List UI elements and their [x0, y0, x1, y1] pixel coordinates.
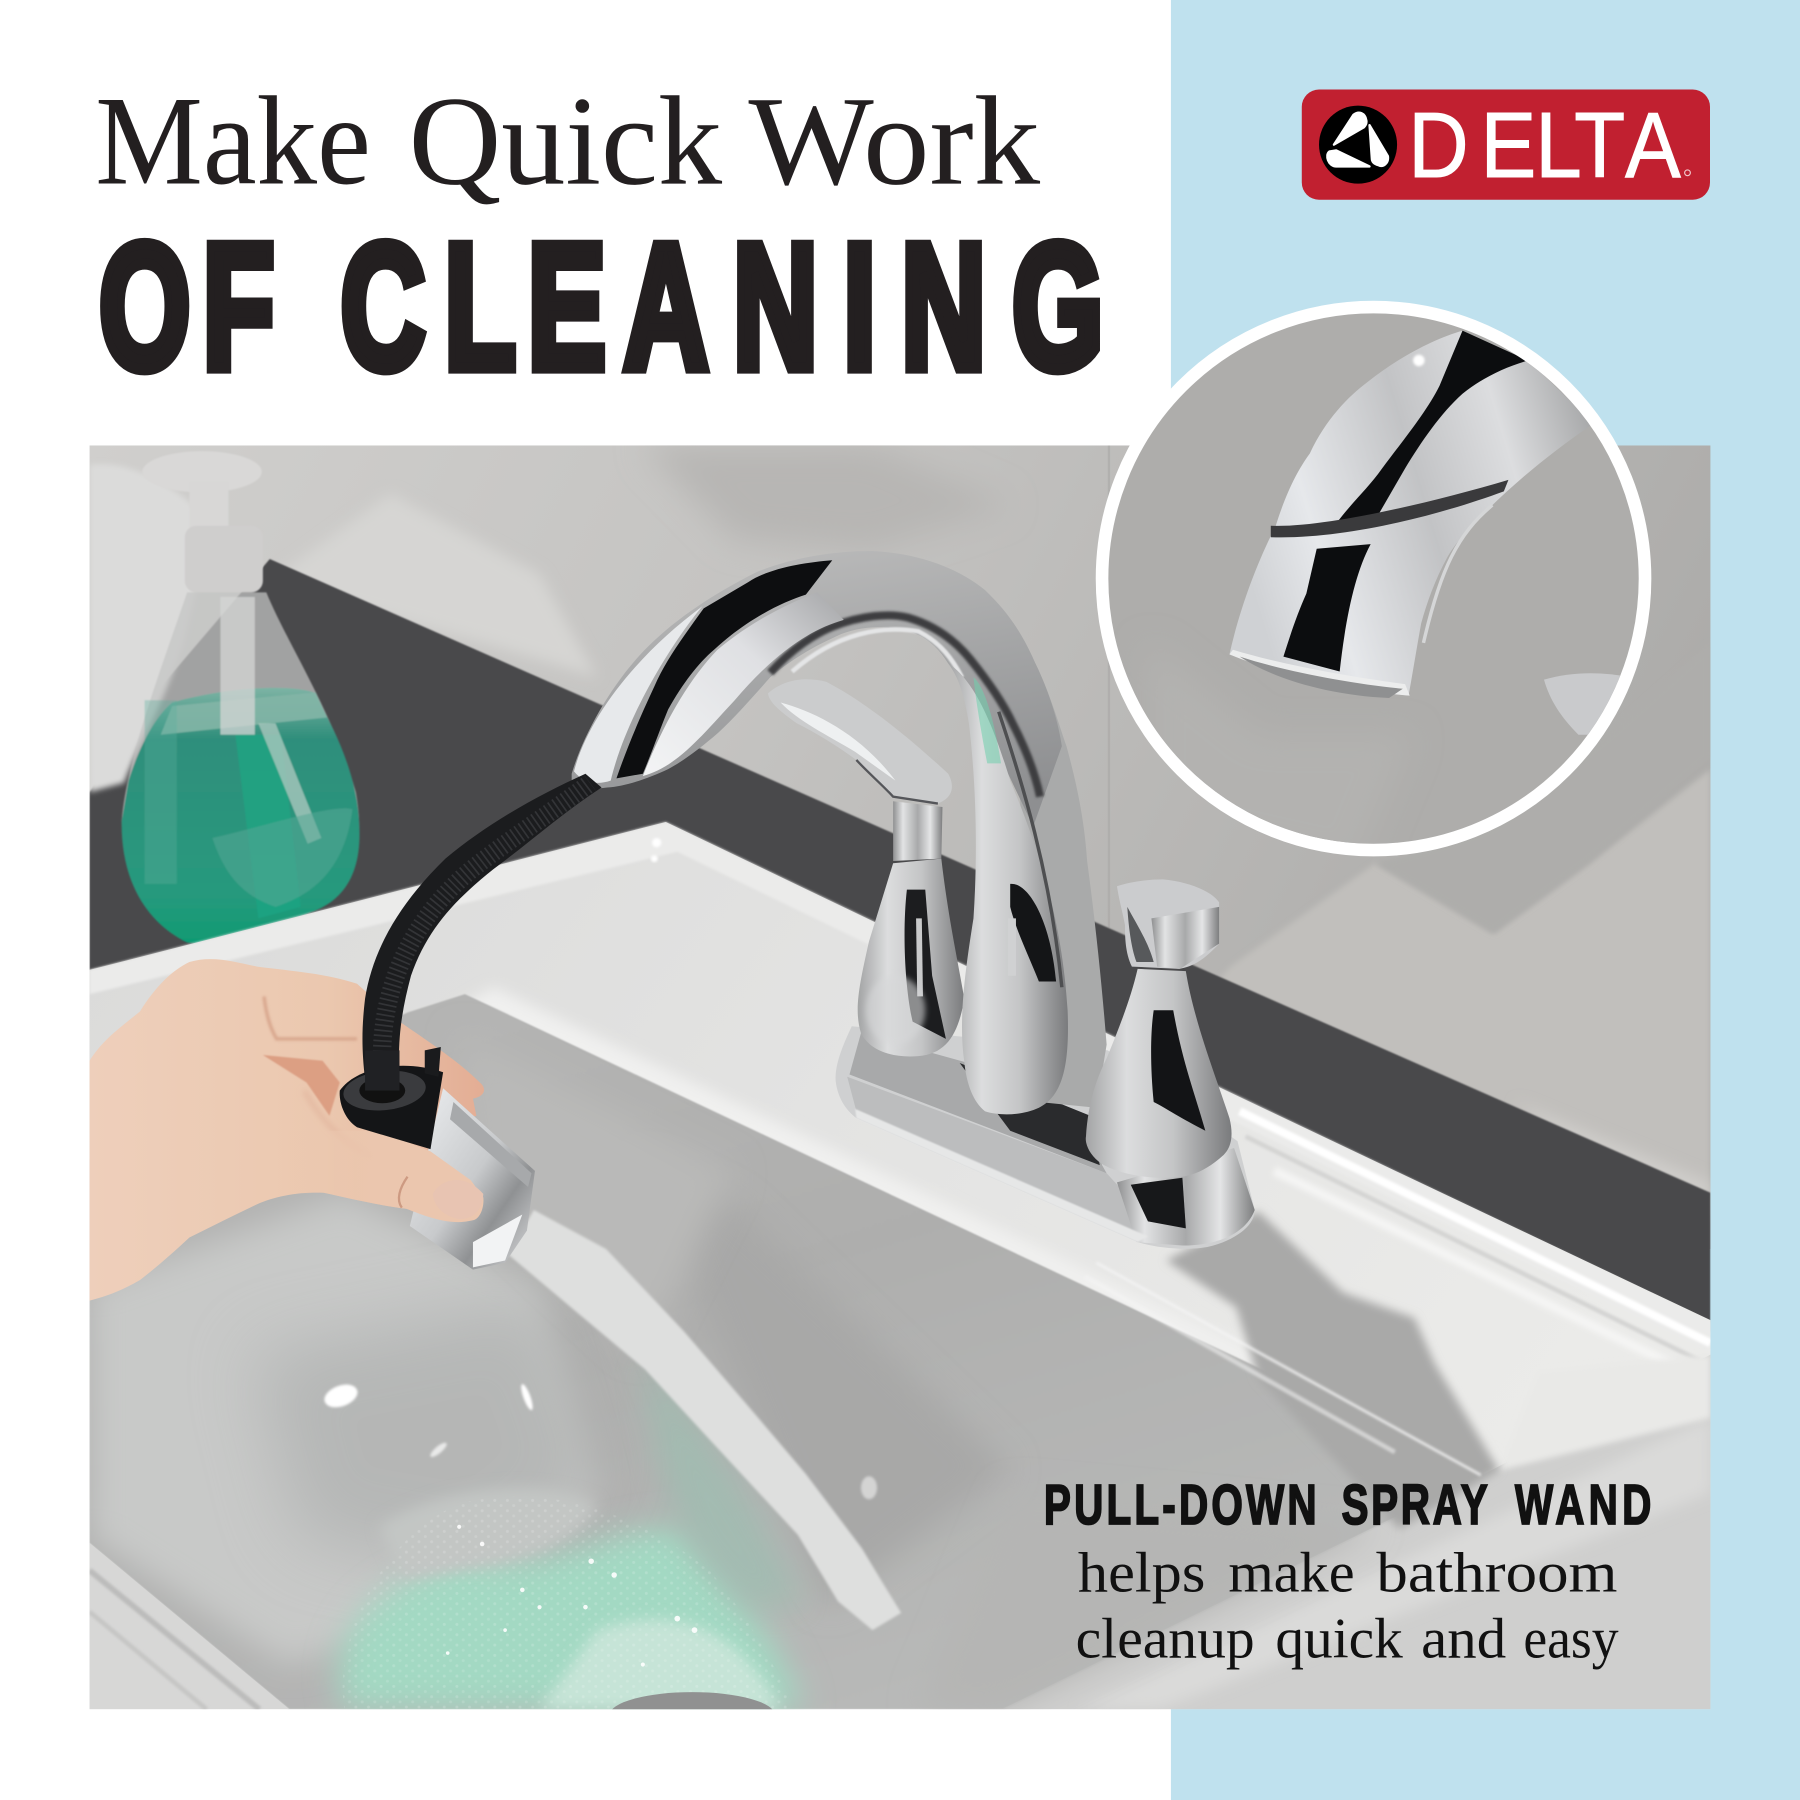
glossy edge lines	[1085, 1263, 1481, 1475]
dark inner arch reflection	[770, 615, 1040, 797]
left handle	[768, 679, 964, 1056]
front trunk	[948, 664, 1068, 1114]
background: blue panel	[1171, 0, 1800, 1800]
soap bottle	[122, 451, 360, 944]
drain	[612, 1692, 772, 1710]
caption line 2: quick	[1275, 1608, 1403, 1671]
dark seam	[1271, 480, 1508, 537]
black reflection on spout	[616, 560, 832, 778]
faucet shadow on deck	[1166, 1211, 1499, 1529]
caption line 1	[1078, 1542, 1617, 1605]
upper black band	[1336, 331, 1528, 523]
front right rim	[1003, 1355, 1710, 1709]
title line 1: Quick	[409, 70, 722, 212]
wall tone variations	[1148, 643, 1412, 872]
spray head	[410, 1088, 535, 1270]
title line 1: Work	[748, 70, 1040, 212]
white band along basin edge	[475, 990, 1192, 1330]
braided hose	[362, 774, 602, 1079]
hand: thumb	[308, 1134, 484, 1222]
right handle	[1086, 879, 1232, 1178]
logo: Delta	[1302, 90, 1710, 200]
rim bands	[1079, 1355, 1710, 1709]
basin soft shading	[90, 1033, 1378, 1709]
sink back lip highlights	[90, 822, 1710, 1383]
caption line 2: easy	[1523, 1608, 1619, 1671]
title line 2: OF CLEANING	[99, 207, 1103, 406]
small handle glimpse	[1544, 673, 1630, 735]
caption heading: SPRAY	[1341, 1475, 1488, 1537]
basin interior	[90, 994, 1484, 1709]
caption line 2: cleanup	[1076, 1608, 1255, 1671]
hand: palm and fingers	[90, 959, 484, 1301]
title line 1	[95, 70, 1040, 212]
dark countertop	[90, 559, 1710, 1332]
basin reflections	[321, 1380, 877, 1499]
caption heading: WAND	[1515, 1475, 1651, 1537]
caption	[1044, 1475, 1651, 1671]
caption line 2: and	[1421, 1608, 1506, 1671]
logo wordmark: DELTA	[1408, 93, 1681, 197]
back shell of trunk	[1020, 692, 1107, 1107]
caption line 2	[1076, 1608, 1619, 1671]
lower black band	[1283, 544, 1371, 672]
photo panel: bathroom sink	[90, 445, 1710, 1738]
hose collar	[340, 1047, 443, 1149]
caption line 1: make	[1228, 1542, 1355, 1605]
towel	[90, 465, 192, 796]
wall with diamond tiles	[90, 445, 1710, 1249]
caption line 1: helps	[1078, 1542, 1205, 1605]
logo mark	[1319, 106, 1397, 184]
white shine on spout	[643, 592, 844, 776]
title line 1: Make	[95, 70, 371, 212]
arch body	[572, 551, 1062, 827]
sink deck	[90, 822, 1710, 1709]
caption line 1: bathroom	[1376, 1542, 1617, 1605]
inset circle: spout close-up	[1102, 307, 1645, 872]
front left rim	[90, 1543, 289, 1709]
water stream	[509, 1210, 901, 1630]
spout arch and trunk	[572, 551, 1107, 1114]
green foam in basin	[339, 1355, 804, 1709]
spout body	[1229, 331, 1593, 696]
caption heading: PULL-DOWN	[1044, 1475, 1317, 1537]
caption heading	[1044, 1475, 1651, 1537]
faucet base plate	[836, 1026, 1255, 1249]
